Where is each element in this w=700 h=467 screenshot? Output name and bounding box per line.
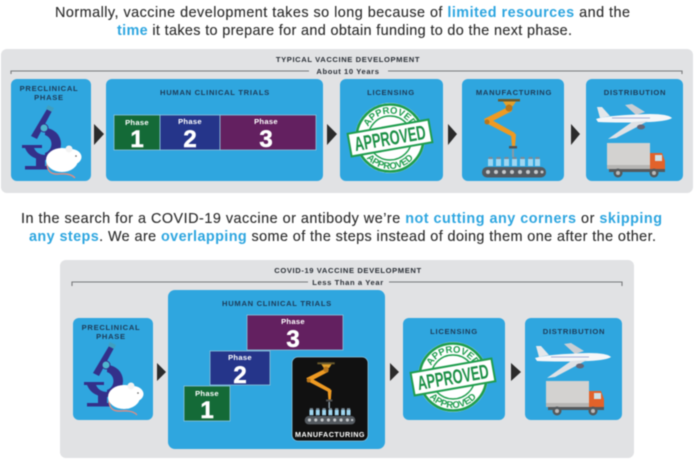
phase 2 <box>210 351 270 389</box>
card: human clinical trials: HUMAN CLINICAL TRIALS <box>160 88 270 97</box>
icon: microscope and mouse <box>22 105 82 178</box>
card: preclinical phase: PRECLINICAL <box>82 323 140 332</box>
phase 1: 1 <box>130 126 144 153</box>
arrow <box>511 363 521 381</box>
manufacturing box <box>292 357 368 441</box>
card: preclinical phase: PRECLINICAL <box>20 84 78 93</box>
icon: approved stamp <box>346 102 434 174</box>
arrow <box>327 124 337 145</box>
middle text <box>21 211 662 245</box>
phase 3: Phase <box>254 117 278 126</box>
icon: approved stamp: APPROVED <box>426 345 479 366</box>
icon: approved stamp: APPROVED <box>416 361 491 395</box>
arrow <box>157 363 166 381</box>
icon: truck <box>607 143 665 178</box>
card: preclinical phase <box>11 79 91 181</box>
card: licensing <box>402 317 506 421</box>
icon: airplane <box>596 104 672 139</box>
card: licensing: LICENSING <box>430 327 478 336</box>
phase 3 <box>247 315 343 353</box>
card: human clinical trials <box>106 79 323 181</box>
phase 2: 2 <box>183 126 197 153</box>
phase 2 <box>160 115 220 153</box>
icon: approved stamp <box>408 341 498 413</box>
card: human clinical trials: HUMAN CLINICAL TRIALS <box>222 299 332 308</box>
arrow <box>390 363 399 381</box>
timeline: about 10 years: About 10 Years <box>316 67 380 76</box>
phase 3: Phase <box>281 317 305 326</box>
card: preclinical phase: PHASE <box>34 93 64 102</box>
icon: robot arm and conveyor <box>305 362 355 424</box>
phase 1: Phase <box>125 118 149 127</box>
icon: approved stamp: APPROVED <box>366 154 413 170</box>
phase 3 <box>220 115 316 153</box>
phase 1: 1 <box>200 397 214 424</box>
card: preclinical phase: PHASE <box>96 332 126 341</box>
intro text <box>55 5 630 39</box>
icon: truck <box>546 381 604 416</box>
manufacturing box: MANUFACTURING <box>295 430 365 439</box>
phase 2: Phase <box>178 117 202 126</box>
panel: typical vaccine development <box>0 48 694 194</box>
phase 2: 2 <box>233 362 247 389</box>
phase 3: 3 <box>259 126 273 153</box>
phase 1 <box>184 386 230 424</box>
timeline: less than a year: Less Than a Year <box>312 278 384 287</box>
icon: approved stamp: APPROVED <box>429 393 476 409</box>
card: distribution: DISTRIBUTION <box>604 88 666 97</box>
middle text: any steps. We are overlapping some of the steps instead of doing them one after the other. <box>29 229 656 245</box>
phase 3: 3 <box>286 326 300 353</box>
icon: microscope and mouse <box>84 342 144 415</box>
intro text: time it takes to prepare for and obtain funding to do the next phase. <box>117 23 572 39</box>
heading: typical vaccine development: TYPICAL VACCINE DEVELOPMENT <box>276 55 420 64</box>
card: licensing: LICENSING <box>367 88 415 97</box>
icon: approved stamp: APPROVED <box>353 122 428 156</box>
arrow <box>448 124 457 145</box>
icon: airplane <box>535 343 611 378</box>
icon: approved stamp: APPROVED <box>364 106 416 127</box>
icon: robot arm and conveyor <box>482 99 546 178</box>
timeline: about 10 years <box>11 67 682 76</box>
heading: covid-19 vaccine development: COVID-19 VACCINE DEVELOPMENT <box>274 266 422 275</box>
card: distribution <box>586 79 683 181</box>
timeline: less than a year <box>72 278 622 287</box>
arrow <box>571 124 580 145</box>
panel: covid-19 vaccine development <box>60 260 634 458</box>
card: preclinical phase <box>73 318 153 420</box>
card: human clinical trials <box>168 290 385 449</box>
card: distribution: DISTRIBUTION <box>543 327 605 336</box>
middle text: In the search for a COVID-19 vaccine or antibody we’re not cutting any corners or skipping <box>21 211 662 227</box>
card: manufacturing <box>462 79 564 181</box>
phase 1: Phase <box>195 389 219 398</box>
card: distribution <box>525 318 622 420</box>
arrow <box>94 124 104 145</box>
phase 1 <box>114 115 160 153</box>
phase 2: Phase <box>228 353 252 362</box>
card: manufacturing: MANUFACTURING <box>476 88 552 97</box>
intro text: Normally, vaccine development takes so long because of limited resources and the <box>55 5 630 21</box>
card: licensing <box>339 78 444 182</box>
